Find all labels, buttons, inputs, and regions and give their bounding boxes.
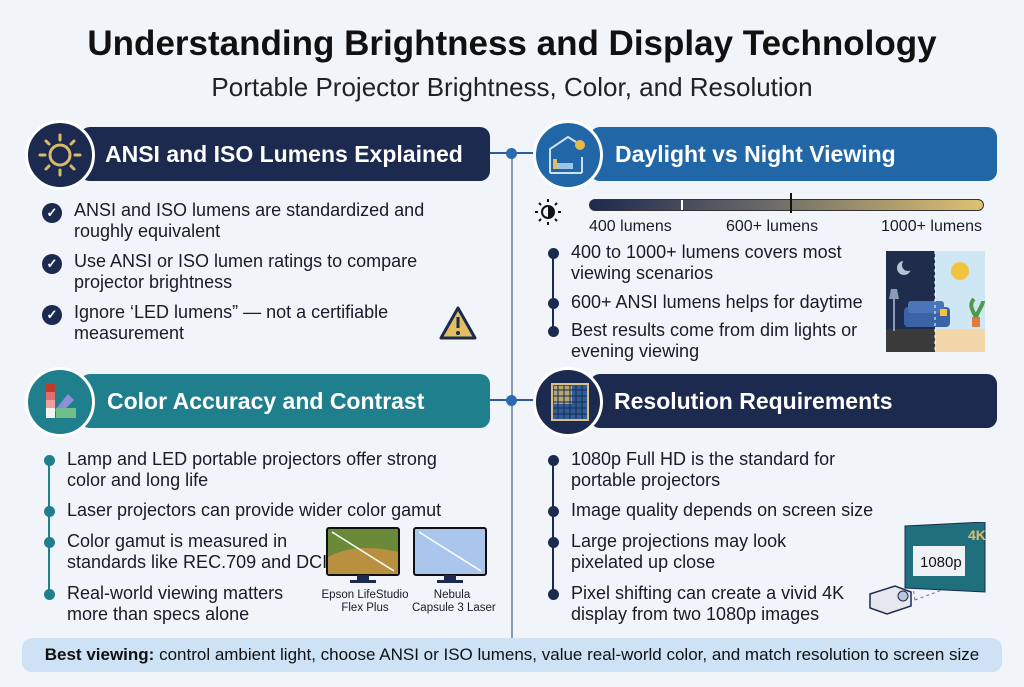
- checklist: ✓: [47, 256, 57, 271]
- bullet list: pixelated up close: [571, 552, 715, 572]
- illustration: two monitors: Nebula: [434, 589, 470, 601]
- heading: Color Accuracy and Contrast: [80, 374, 490, 428]
- subtitle: Portable Projector Brightness, Color, and Resolution: [211, 72, 813, 102]
- checklist: [42, 200, 424, 343]
- bullet list: evening viewing: [571, 341, 699, 361]
- bullet list: portable projectors: [571, 470, 720, 490]
- brightness scale: 1000+ lumens: [881, 218, 982, 235]
- panel: ANSI and ISO lumens: [25, 120, 490, 343]
- bullet list: [548, 449, 873, 624]
- brightness scale: 400 lumens: [589, 218, 672, 235]
- heading: ANSI and ISO Lumens Explained: [80, 127, 490, 181]
- illustration: projector 4K screen: 4K: [968, 527, 986, 543]
- illustration: two monitors: Flex Plus: [341, 602, 389, 614]
- bullet list: Color gamut is measured in: [67, 531, 287, 551]
- bullet list: [548, 242, 863, 361]
- bullet list: 400 to 1000+ lumens covers most: [571, 242, 842, 262]
- bullet list: Lamp and LED portable projectors offer strong: [67, 449, 437, 469]
- icon: warning: [440, 306, 477, 340]
- icon: sun: [25, 120, 95, 190]
- illustration: projector 4K screen: 1080p: [920, 554, 962, 571]
- checklist: projector brightness: [74, 272, 232, 292]
- bullet list: color and long life: [67, 470, 208, 490]
- heading: ANSI and ISO Lumens Explained: ANSI and ISO Lumens Explained: [105, 141, 463, 167]
- bullet list: 600+ ANSI lumens helps for daytime: [571, 292, 863, 312]
- heading: Daylight vs Night Viewing: Daylight vs Night Viewing: [615, 141, 896, 167]
- checklist: measurement: [74, 323, 184, 343]
- heading: Resolution Requirements: [590, 374, 997, 428]
- center divider: [511, 150, 513, 640]
- bullet list: 1080p Full HD is the standard for: [571, 449, 835, 469]
- heading: Resolution Requirements: Resolution Requirements: [614, 388, 893, 414]
- checklist: ANSI and ISO lumens are standardized and: [74, 200, 424, 220]
- icon: house sun: [533, 120, 603, 190]
- brightness scale: [535, 193, 984, 235]
- panel: color accuracy: [25, 367, 496, 624]
- illustration: night vs day room: [886, 251, 985, 352]
- title: Understanding Brightness and Display Technology: [87, 24, 937, 63]
- bullet list: Large projections may look: [571, 531, 786, 551]
- checklist: Use ANSI or ISO lumen ratings to compare: [74, 251, 417, 271]
- brightness scale: 600+ lumens: [726, 218, 818, 235]
- heading: Daylight vs Night Viewing: [590, 127, 997, 181]
- icon: color swatches: [25, 367, 95, 437]
- panel: resolution: [533, 367, 997, 624]
- heading: Color Accuracy and Contrast: Color Accuracy and Contrast: [107, 388, 424, 414]
- illustration: projector 4K screen: [869, 522, 986, 615]
- checklist: ✓: [47, 205, 57, 220]
- bullet list: [44, 449, 441, 624]
- bullet list: standards like REC.709 and DCI-P3: [67, 552, 355, 572]
- illustration: two monitors: Capsule 3 Laser: [412, 602, 496, 614]
- bullet list: more than specs alone: [67, 604, 249, 624]
- checklist: roughly equivalent: [74, 221, 220, 241]
- bottom summary bar: [22, 638, 1002, 672]
- bottom summary bar: Best viewing: control ambient light, choose ANSI or ISO lumens, value real-world color, and match resolution to screen size: [45, 645, 979, 664]
- icon: pixel grid: [533, 367, 603, 437]
- panel: daylight vs night: [533, 120, 997, 361]
- bullet list: Laser projectors can provide wider color gamut: [67, 500, 441, 520]
- bullet list: viewing scenarios: [571, 263, 713, 283]
- illustration: two monitors: Epson LifeStudio: [322, 589, 408, 601]
- bullet list: display from two 1080p images: [571, 604, 819, 624]
- bullet list: Real-world viewing matters: [67, 583, 283, 603]
- bullet list: Best results come from dim lights or: [571, 320, 857, 340]
- checklist: Ignore ‘LED lumens” — not a certifiable: [74, 302, 388, 322]
- illustration: two monitors: [322, 527, 496, 614]
- bullet list: Pixel shifting can create a vivid 4K: [571, 583, 844, 603]
- bullet list: Image quality depends on screen size: [571, 500, 873, 520]
- checklist: ✓: [47, 307, 57, 322]
